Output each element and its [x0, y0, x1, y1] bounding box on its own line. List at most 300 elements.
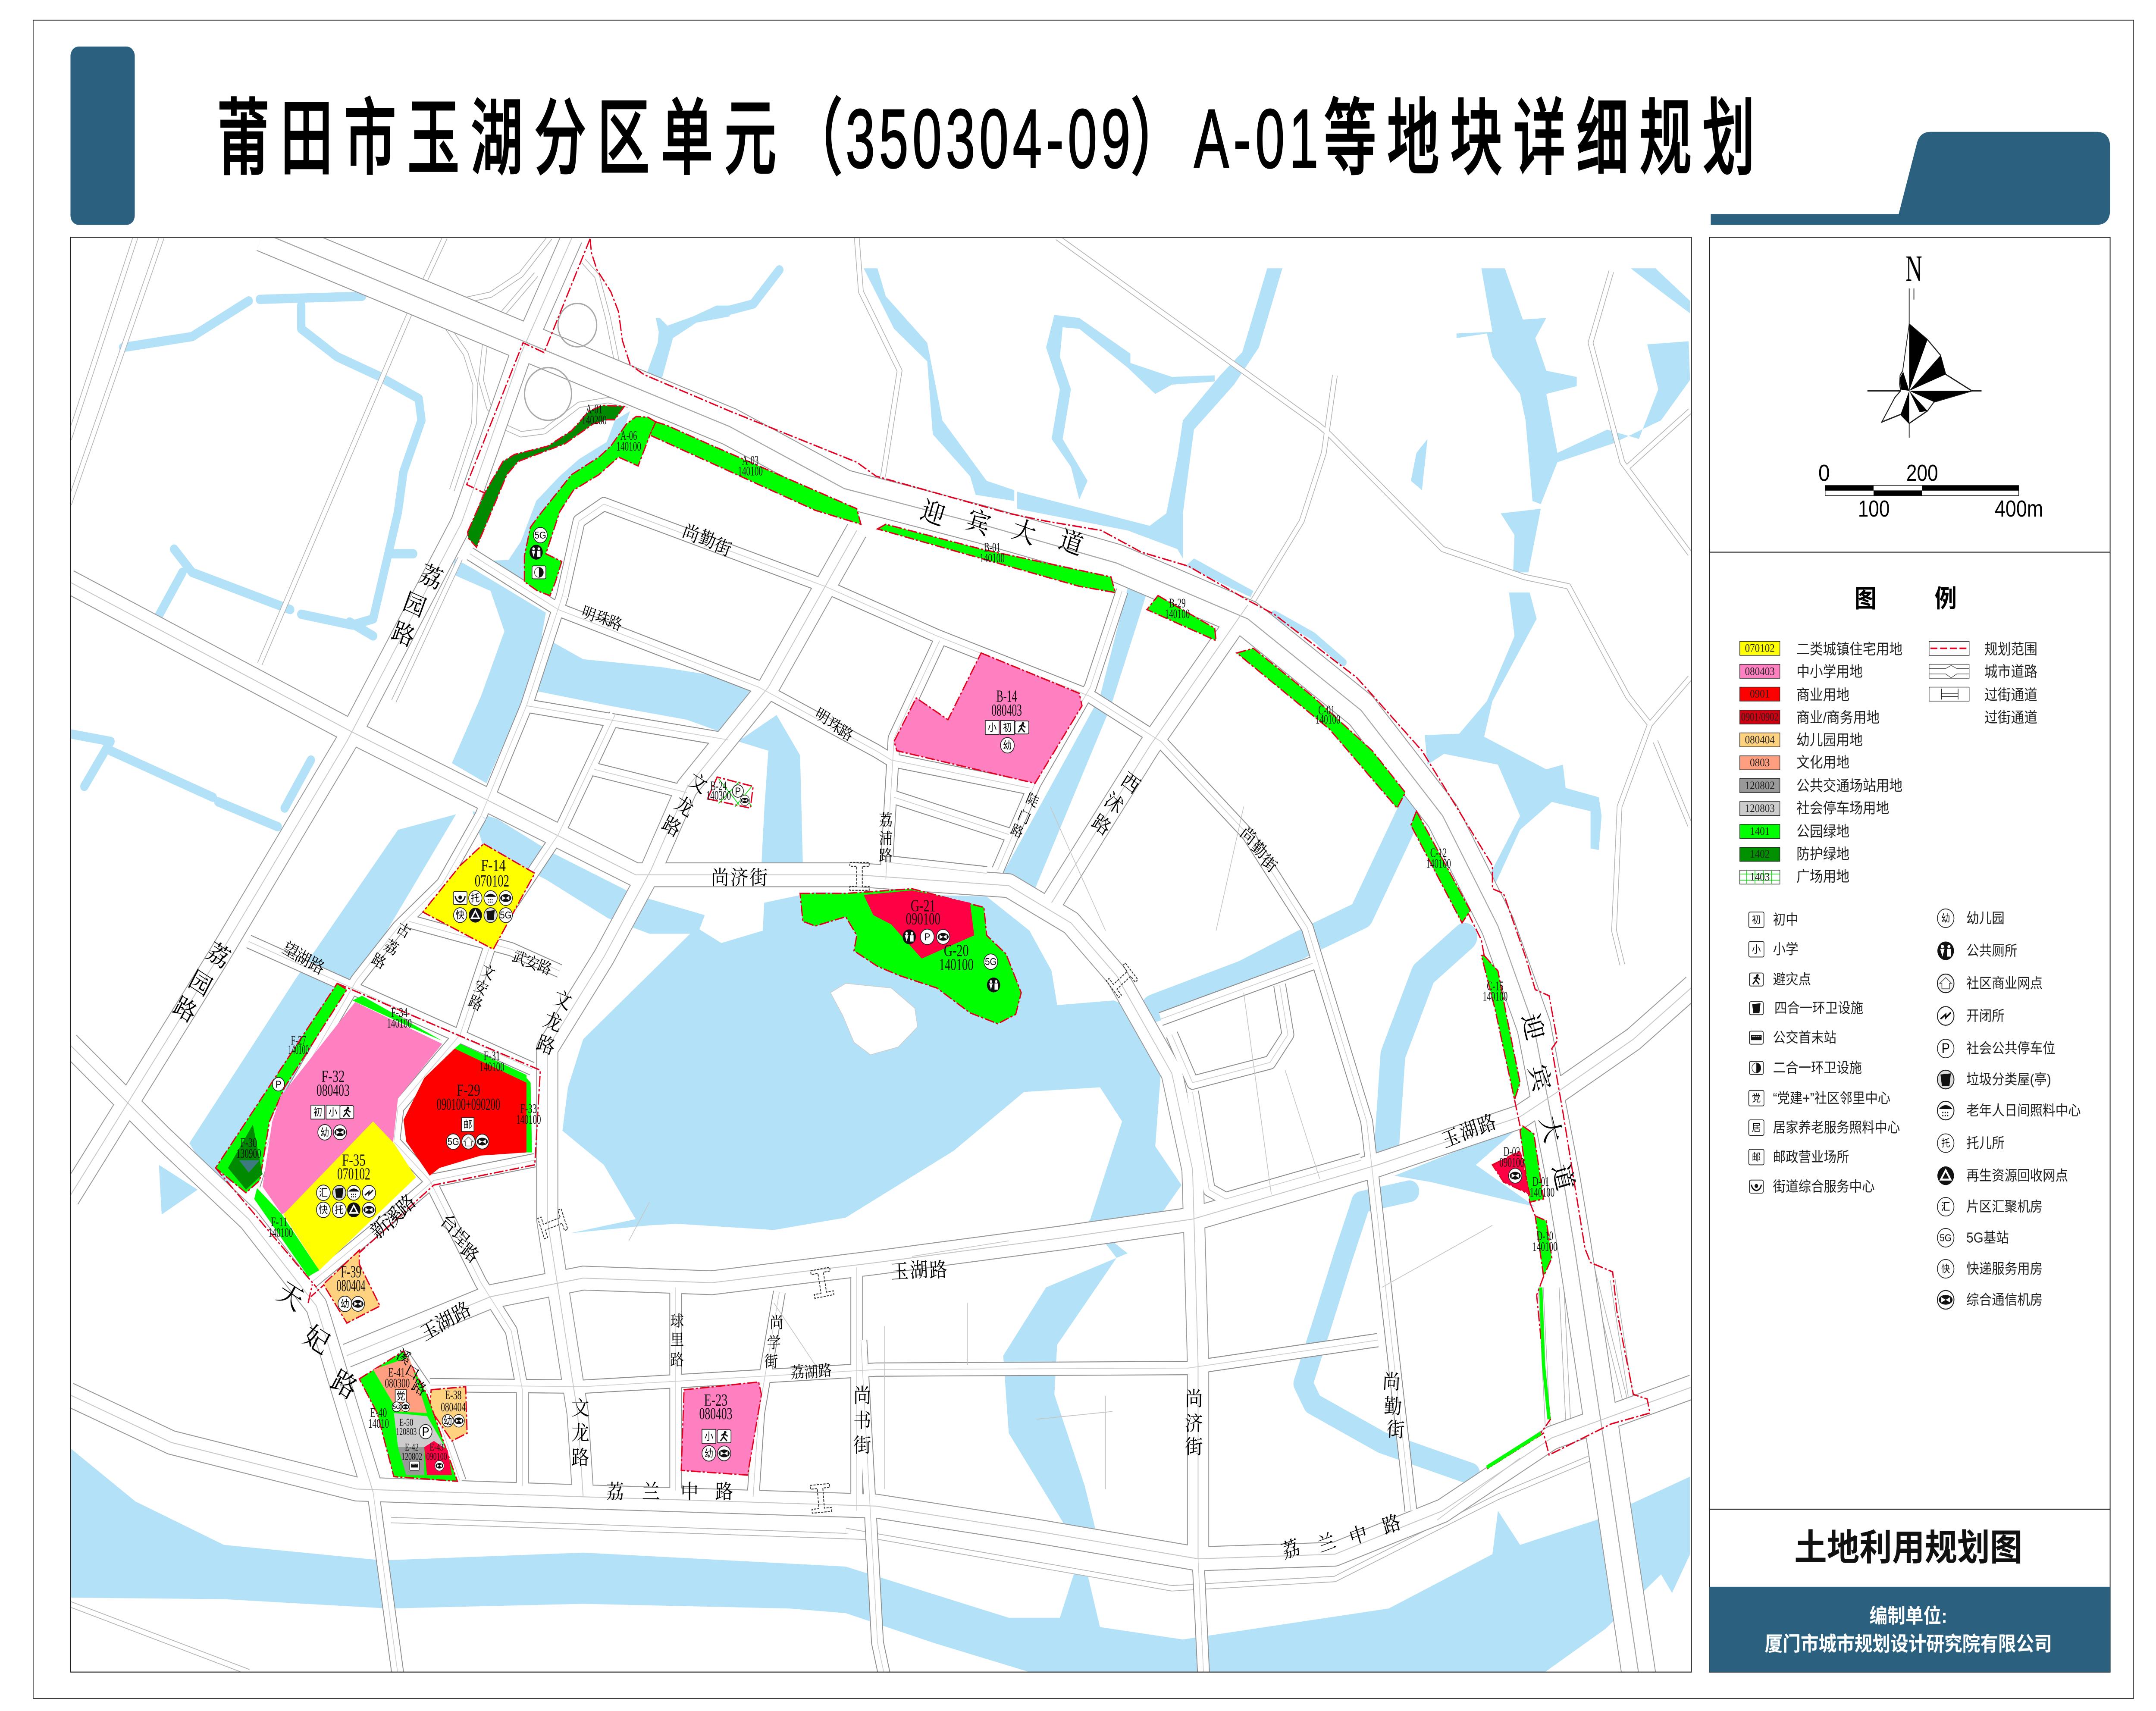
compiler block: 厦门市城市规划设计研究院有限公司: [1765, 1633, 2052, 1655]
road names: 溪: [394, 1346, 413, 1368]
road names: 路: [1009, 821, 1025, 841]
legend: facility symbols right column: 5G基站: [1966, 1230, 2009, 1246]
facility icons: 党: [396, 1390, 405, 1402]
legend: land use swatches: 1403: [1750, 871, 1770, 883]
compiler block: [1709, 1587, 2110, 1672]
legend: facility symbols right column: 社区商业网点: [1966, 975, 2043, 991]
parcel labels: C-12: [1430, 846, 1447, 860]
parcel labels: 090100: [906, 910, 940, 928]
road names: 路: [818, 1362, 833, 1380]
parcel labels: 080403: [699, 1404, 733, 1423]
road names: 路: [534, 1031, 558, 1059]
road names: 路: [1380, 1511, 1403, 1539]
road names: 路: [449, 1297, 474, 1327]
road names: 宾: [1523, 1062, 1555, 1094]
road names: 文: [571, 1397, 589, 1420]
parcel labels: 080404: [336, 1276, 366, 1295]
parcel labels: 140200: [582, 413, 607, 427]
road names: [169, 495, 1579, 1563]
parcel labels: [236, 402, 1557, 1462]
title: A-01: [1194, 92, 1318, 185]
legend: facility symbols left column: 小: [1752, 943, 1761, 955]
planning boundary: [216, 239, 1650, 1469]
legend: line symbols: 过街通道: [1984, 709, 2037, 726]
road names: 路: [670, 1351, 684, 1369]
parcel labels: F-32: [321, 1067, 345, 1086]
legend: facility symbols left column: 邮政营业场所: [1773, 1149, 1849, 1165]
road names: 学: [767, 1335, 781, 1352]
road names: 龙: [541, 1008, 564, 1036]
road names: 路: [715, 1481, 733, 1503]
parcel F-33 park green: [526, 1078, 532, 1153]
legend: facility symbols right column: 托儿所: [1966, 1135, 2005, 1151]
facility icons: P: [422, 1425, 429, 1439]
legend: land use swatches: 120802: [1745, 780, 1775, 792]
parcel labels: D-01: [1532, 1175, 1549, 1189]
parcel labels: B-29: [1169, 596, 1186, 611]
parcel F-11 park green: [254, 1188, 319, 1276]
road names: 台: [437, 1210, 461, 1238]
road names: 陡: [1024, 790, 1041, 810]
legend: facility symbols left column: 居家养老服务照料中心: [1773, 1120, 1900, 1136]
road names: 明: [812, 705, 832, 728]
legend: facility symbols right column: 综合通信机房: [1966, 1292, 2043, 1308]
legend: facility symbols left column: 公交首末站: [1773, 1030, 1836, 1046]
parcel labels: F-33: [520, 1102, 537, 1116]
water system: [69, 268, 1690, 1672]
parcel F-32 school: [263, 1002, 442, 1215]
road names: 文: [685, 768, 711, 798]
road names: 尚: [680, 520, 702, 547]
map panel: land use plan: [69, 233, 1693, 1675]
legend: land use swatches: 公园绿地: [1796, 823, 1849, 840]
facility icons: 5G: [985, 956, 997, 967]
road names: 书: [853, 1410, 871, 1432]
road names: 湖: [804, 1363, 819, 1382]
facility icons: 幼: [320, 1127, 329, 1138]
facility icons: 小: [705, 1431, 713, 1442]
facility icons: 快: [319, 1204, 328, 1216]
parcel labels: E-50: [399, 1416, 413, 1428]
facility icons: 幼: [705, 1448, 713, 1459]
legend: land use swatches: 070102: [1745, 642, 1775, 655]
road names: 路: [458, 1239, 482, 1267]
road names: 济: [730, 867, 748, 889]
parcel labels: 140100: [939, 956, 974, 974]
legend: land use swatches: 080403: [1745, 665, 1775, 678]
facility icons: 小: [988, 722, 997, 733]
legend: facility symbols left column: 党: [1752, 1093, 1761, 1104]
north arrow and wind rose: [1868, 248, 1981, 438]
road names: 安: [523, 952, 542, 974]
road names: 荔: [879, 812, 893, 829]
parcel C-12 park green: [1411, 811, 1470, 923]
parcel labels: B-14: [997, 687, 1017, 706]
parcel labels: 140100: [738, 464, 763, 479]
road names: 路: [659, 812, 684, 841]
parcel labels: 140100: [616, 440, 641, 454]
legend: facility symbols right column: 老年人日间照料中心: [1966, 1103, 2081, 1119]
parcel labels: F-27: [291, 1034, 306, 1048]
road names: 街: [764, 1354, 778, 1370]
road names: 路: [393, 1190, 420, 1220]
legend heading: 图: [1855, 585, 1877, 613]
parcel labels: E-23: [704, 1391, 727, 1410]
parcel labels: 140100: [1165, 607, 1190, 621]
legend: line symbols: [1929, 641, 2037, 726]
road names: 路: [879, 847, 893, 865]
road names: 街: [711, 535, 734, 561]
parcel F-30 protective green and pump: [228, 1125, 263, 1190]
facility icons: 幼: [443, 1415, 452, 1426]
road names: 妃: [299, 1320, 334, 1360]
parcel labels: G-21: [911, 896, 936, 915]
road names: 路: [409, 1377, 429, 1399]
parcel labels: E-38: [445, 1388, 461, 1402]
scale bar: 400m: [1995, 495, 2043, 521]
facility icons: 汇: [319, 1187, 328, 1198]
road names: 迎: [918, 495, 948, 532]
facility icons: 幼: [341, 1298, 349, 1310]
road names: 荔: [203, 937, 234, 974]
parcel F-31 park green: [454, 1044, 526, 1083]
road names: 安: [471, 977, 491, 999]
facility icons: 邮: [464, 1119, 472, 1130]
parcel A-06 park green: [524, 417, 656, 595]
legend: facility symbols left column: 四合一环卫设施: [1774, 1000, 1863, 1016]
parcel labels: 140100: [1483, 990, 1507, 1004]
parcel labels: F-11: [271, 1215, 288, 1229]
parcel B-24 plaza: [708, 777, 753, 808]
parcel labels: 140100: [479, 1060, 505, 1074]
road names: 路: [571, 1447, 589, 1469]
road names: 路: [369, 950, 389, 973]
parcel A-03 park green: [650, 422, 861, 524]
scale bar: 100: [1858, 495, 1890, 521]
road names: 文: [551, 987, 574, 1014]
legend: facility symbols left column: 初中: [1773, 912, 1799, 928]
legend: land use swatches: 社会停车场用地: [1796, 800, 1889, 817]
parcel labels: A-03: [742, 454, 758, 468]
scale bar: 200: [1906, 460, 1938, 486]
road names: 道: [1547, 1161, 1579, 1194]
legend: land use swatches: [1740, 641, 1902, 885]
parcel labels: A-06: [620, 429, 637, 443]
title bar accent block: [70, 47, 135, 225]
legend: facility symbols right column: [1937, 909, 2081, 1309]
facility icons: P: [276, 1078, 282, 1090]
compiler block: 编制单位:: [1869, 1605, 1947, 1627]
drawing name: 土地利用规划图: [1794, 1527, 2022, 1568]
road names: 路: [836, 722, 856, 745]
parcel labels: 140100: [1532, 1240, 1557, 1254]
road names: 荔: [381, 936, 401, 959]
road names: 明: [580, 604, 598, 625]
road names: 迎: [1517, 1010, 1548, 1044]
road names: 荔: [1279, 1536, 1302, 1563]
road names: 天: [273, 1276, 308, 1317]
parcel labels: 140100: [1426, 857, 1451, 871]
parcel labels: G-20: [944, 941, 969, 960]
road names: 路: [466, 992, 485, 1015]
road names: 龙: [671, 792, 697, 821]
facility icons: 5G: [534, 530, 546, 541]
southern green strip: [1487, 1288, 1549, 1467]
parcel labels: 070102: [475, 872, 509, 890]
legend: facility symbols left column: 邮: [1752, 1151, 1761, 1163]
facility icons: 小: [329, 1106, 338, 1118]
title: ）: [1130, 92, 1183, 185]
legend: facility symbols right column: 快: [1941, 1263, 1950, 1275]
road network: [69, 233, 1693, 1675]
parcel labels: F-30: [241, 1136, 257, 1150]
legend: land use swatches: 幼儿园用地: [1796, 731, 1863, 748]
title decoration right: [1711, 132, 2110, 225]
parcel E-23 school: [681, 1382, 761, 1475]
road names: 尚: [1237, 823, 1259, 849]
title: [217, 92, 1755, 185]
road names: 勤: [1248, 837, 1270, 863]
parcel labels: F-14: [481, 856, 506, 875]
parcel labels: 130900: [236, 1147, 261, 1161]
road names: 龙: [571, 1422, 589, 1445]
parcel labels: D-10: [1537, 1229, 1553, 1243]
parcel labels: 090100: [426, 1451, 447, 1462]
parcel labels: 080403: [991, 701, 1022, 720]
legend: land use swatches: 1402: [1750, 848, 1770, 861]
parcel D-02 commercial: [1492, 1151, 1530, 1194]
parcel labels: 080404: [441, 1401, 466, 1414]
parcel labels: E-43: [430, 1442, 444, 1453]
road names: 湖: [1457, 1117, 1481, 1145]
legend: land use swatches: 0803: [1750, 757, 1770, 769]
road names: 中: [1347, 1522, 1370, 1549]
parcel labels: 140100: [1530, 1186, 1554, 1200]
road names: 街: [750, 867, 768, 889]
parcel labels: E-40: [370, 1406, 387, 1420]
parcel labels: F-29: [457, 1081, 480, 1100]
facility icons: 5G: [500, 909, 512, 921]
road names: 溪: [380, 1203, 407, 1233]
legend: facility symbols right column: 垃圾分类屋(亭): [1966, 1072, 2051, 1087]
legend heading: [1855, 585, 1957, 613]
facility icons: 初: [1003, 722, 1012, 733]
road names: 湖: [909, 1259, 928, 1282]
parcel F-39 kindergarten: [323, 1250, 380, 1323]
parcel labels: F-31: [484, 1049, 500, 1063]
road names: 勤: [696, 527, 719, 553]
road names: 沭: [1101, 789, 1127, 818]
road names: 古: [394, 919, 414, 942]
road names: 新: [367, 1213, 393, 1244]
parcel B-29 park green: [1147, 595, 1216, 641]
north arrow and wind rose: N: [1905, 248, 1922, 289]
legend: land use swatches: 公共交通场站用地: [1796, 777, 1902, 794]
legend: land use swatches: 120803: [1745, 802, 1775, 815]
road names: 尚: [1382, 1370, 1401, 1394]
legend: land use swatches: 080404: [1745, 734, 1775, 746]
legend: land use swatches: 0901/0902: [1741, 711, 1778, 723]
road names: 中: [680, 1481, 699, 1503]
facility icons: [273, 527, 1522, 1471]
facility icons: 初: [313, 1106, 322, 1118]
road names: 珠: [825, 714, 845, 737]
parcel C-15 park green: [1481, 956, 1520, 1100]
facility icons: 5G: [393, 1404, 400, 1410]
parcel labels: 140100: [980, 552, 1005, 565]
legend: facility symbols right column: 片区汇聚机房: [1966, 1199, 2043, 1215]
parcel F-29 commercial and business: [404, 1049, 526, 1176]
parcel labels: 090100+090200: [437, 1095, 500, 1114]
road names: 街: [1185, 1436, 1203, 1458]
legend: land use swatches: 1401: [1750, 825, 1770, 837]
legend: facility symbols left column: [1749, 912, 1900, 1194]
facility icons: 托: [335, 1204, 344, 1216]
road names: 尚: [853, 1385, 871, 1407]
crossing passages: [538, 862, 1138, 1513]
legend: facility symbols right column: 再生资源回收网点: [1966, 1168, 2068, 1184]
legend: facility symbols right column: 社会公共停车位: [1966, 1040, 2056, 1056]
road names: 路: [389, 617, 418, 652]
legend: facility symbols left column: 小学: [1773, 941, 1799, 957]
parcel labels: 14010: [368, 1417, 389, 1431]
road names: 玉: [890, 1260, 909, 1284]
road names: 玉: [417, 1316, 442, 1345]
legend: land use swatches: 文化用地: [1796, 754, 1849, 771]
road names: 路: [535, 957, 554, 978]
legend: facility symbols right column: 5G: [1940, 1232, 1952, 1244]
parcel A-01 protective green: [467, 405, 624, 547]
parcel F-14 residential: [423, 844, 535, 949]
parcel labels: 140100: [268, 1226, 293, 1240]
parcel labels: B-24: [710, 779, 727, 793]
road names: 园: [185, 965, 216, 1002]
road names: 路: [169, 991, 201, 1028]
parcel labels: 140100: [516, 1113, 541, 1127]
facility icons: P: [735, 785, 741, 797]
parcel F-35 residential: [283, 1122, 416, 1270]
road names: 球: [670, 1313, 684, 1330]
legend: line symbols: 城市道路: [1984, 663, 2037, 680]
scale bar: [1818, 460, 2043, 521]
legend: facility symbols right column: P: [1942, 1041, 1950, 1056]
parcel labels: E-41: [389, 1366, 405, 1380]
parcel E-38 kindergarten: [430, 1387, 467, 1441]
legend: facility symbols left column: 居: [1752, 1122, 1761, 1133]
road names: 湖: [292, 946, 313, 971]
legend: facility symbols right column: 公共厕所: [1966, 943, 2017, 959]
parcel labels: E-42: [405, 1442, 419, 1453]
road names: 荔: [416, 559, 446, 595]
legend: land use swatches: 商业用地: [1796, 686, 1849, 703]
title: （: [790, 92, 843, 185]
road names: 园: [400, 587, 429, 623]
road names: 湖: [432, 1307, 458, 1336]
road names: 街: [853, 1435, 871, 1457]
road names: 口: [402, 1362, 422, 1384]
parcel labels: 140100: [288, 1043, 309, 1057]
legend: facility symbols left column: “党建+”社区邻里中心: [1773, 1090, 1890, 1106]
road names: 埕: [448, 1224, 473, 1252]
title: 350304-09: [846, 92, 1130, 185]
legend: facility symbols left column: 二合一环卫设施: [1773, 1060, 1862, 1076]
title: 等地块详细规划: [1324, 92, 1755, 185]
title: 莆田市玉湖分区单元: [217, 92, 777, 185]
road names: 道: [1056, 525, 1086, 561]
road names: 荔: [606, 1481, 624, 1503]
parcel labels: C-15: [1487, 979, 1504, 993]
legend: facility symbols left column: 初: [1752, 914, 1761, 925]
parcel labels: 140100: [1316, 713, 1341, 727]
parcel labels: F-34: [391, 1006, 407, 1020]
road names: 兰: [1315, 1529, 1338, 1557]
road names: 街: [1386, 1419, 1405, 1442]
parcel labels: 070102: [337, 1165, 370, 1184]
facility icons: 托: [471, 893, 480, 904]
facility icons: P: [924, 931, 930, 943]
road names: 济: [1185, 1413, 1203, 1435]
legend: land use swatches: 0901: [1750, 688, 1770, 700]
legend: facility symbols right column: 快递服务用房: [1966, 1261, 2043, 1277]
road names: 荔: [790, 1363, 805, 1382]
parcel D-10 park green: [1535, 1216, 1552, 1276]
road names: 尚: [711, 867, 729, 889]
road names: 勤: [1383, 1395, 1402, 1419]
legend: line symbols: 规划范围: [1984, 641, 2037, 658]
road names: 浦: [879, 830, 893, 848]
parcel F-34 park green: [352, 996, 442, 1041]
parcel C-01 park green: [1237, 649, 1405, 808]
parcel labels: 140100: [387, 1017, 412, 1031]
road names: 文: [478, 962, 497, 984]
parcel labels: 120803: [396, 1426, 417, 1437]
parcel labels: B-01: [984, 540, 1000, 555]
legend: land use swatches: 防护绿地: [1796, 846, 1849, 862]
road names: 尚: [1185, 1388, 1203, 1410]
legend: facility symbols right column: 幼儿园: [1966, 910, 2005, 926]
road names: 路: [606, 613, 624, 634]
panel: side column: [1709, 237, 2110, 1672]
legend: line symbols: 过街通道: [1984, 686, 2037, 703]
parcel G-21 commercial: [864, 890, 974, 959]
legend: land use swatches: 广场用地: [1796, 868, 1849, 885]
parcel F-27 park green: [216, 984, 347, 1193]
road names: 街: [1257, 851, 1280, 877]
facility icons: 幼: [1003, 740, 1012, 751]
parcel labels: A-01: [586, 402, 602, 417]
road names: 大: [1009, 514, 1039, 550]
legend: facility symbols right column: 汇: [1941, 1201, 1950, 1213]
legend: land use swatches: 二类城镇住宅用地: [1796, 641, 1902, 658]
legend: facility symbols right column: 开闭所: [1966, 1008, 2005, 1024]
road names: 大: [1535, 1112, 1566, 1146]
legend: facility symbols right column: 托: [1941, 1138, 1950, 1149]
parcel labels: 090100: [1499, 1156, 1524, 1170]
parcel labels: C-01: [1318, 703, 1335, 718]
legend: land use swatches: 中小学用地: [1796, 663, 1863, 680]
road names: 尚: [770, 1314, 783, 1332]
road names: 玉: [1439, 1125, 1463, 1153]
road names: 路: [326, 1365, 362, 1406]
parcel D-01 park green: [1520, 1126, 1544, 1202]
parcel labels: F-35: [342, 1151, 366, 1169]
parcel labels: 140300: [706, 789, 731, 803]
parcel labels: 080300: [385, 1376, 410, 1391]
road names: 路: [1088, 810, 1114, 840]
parcel group E-40 to E-43: [359, 1351, 458, 1481]
road names: 西: [1117, 768, 1144, 798]
road names: 路: [929, 1259, 948, 1282]
